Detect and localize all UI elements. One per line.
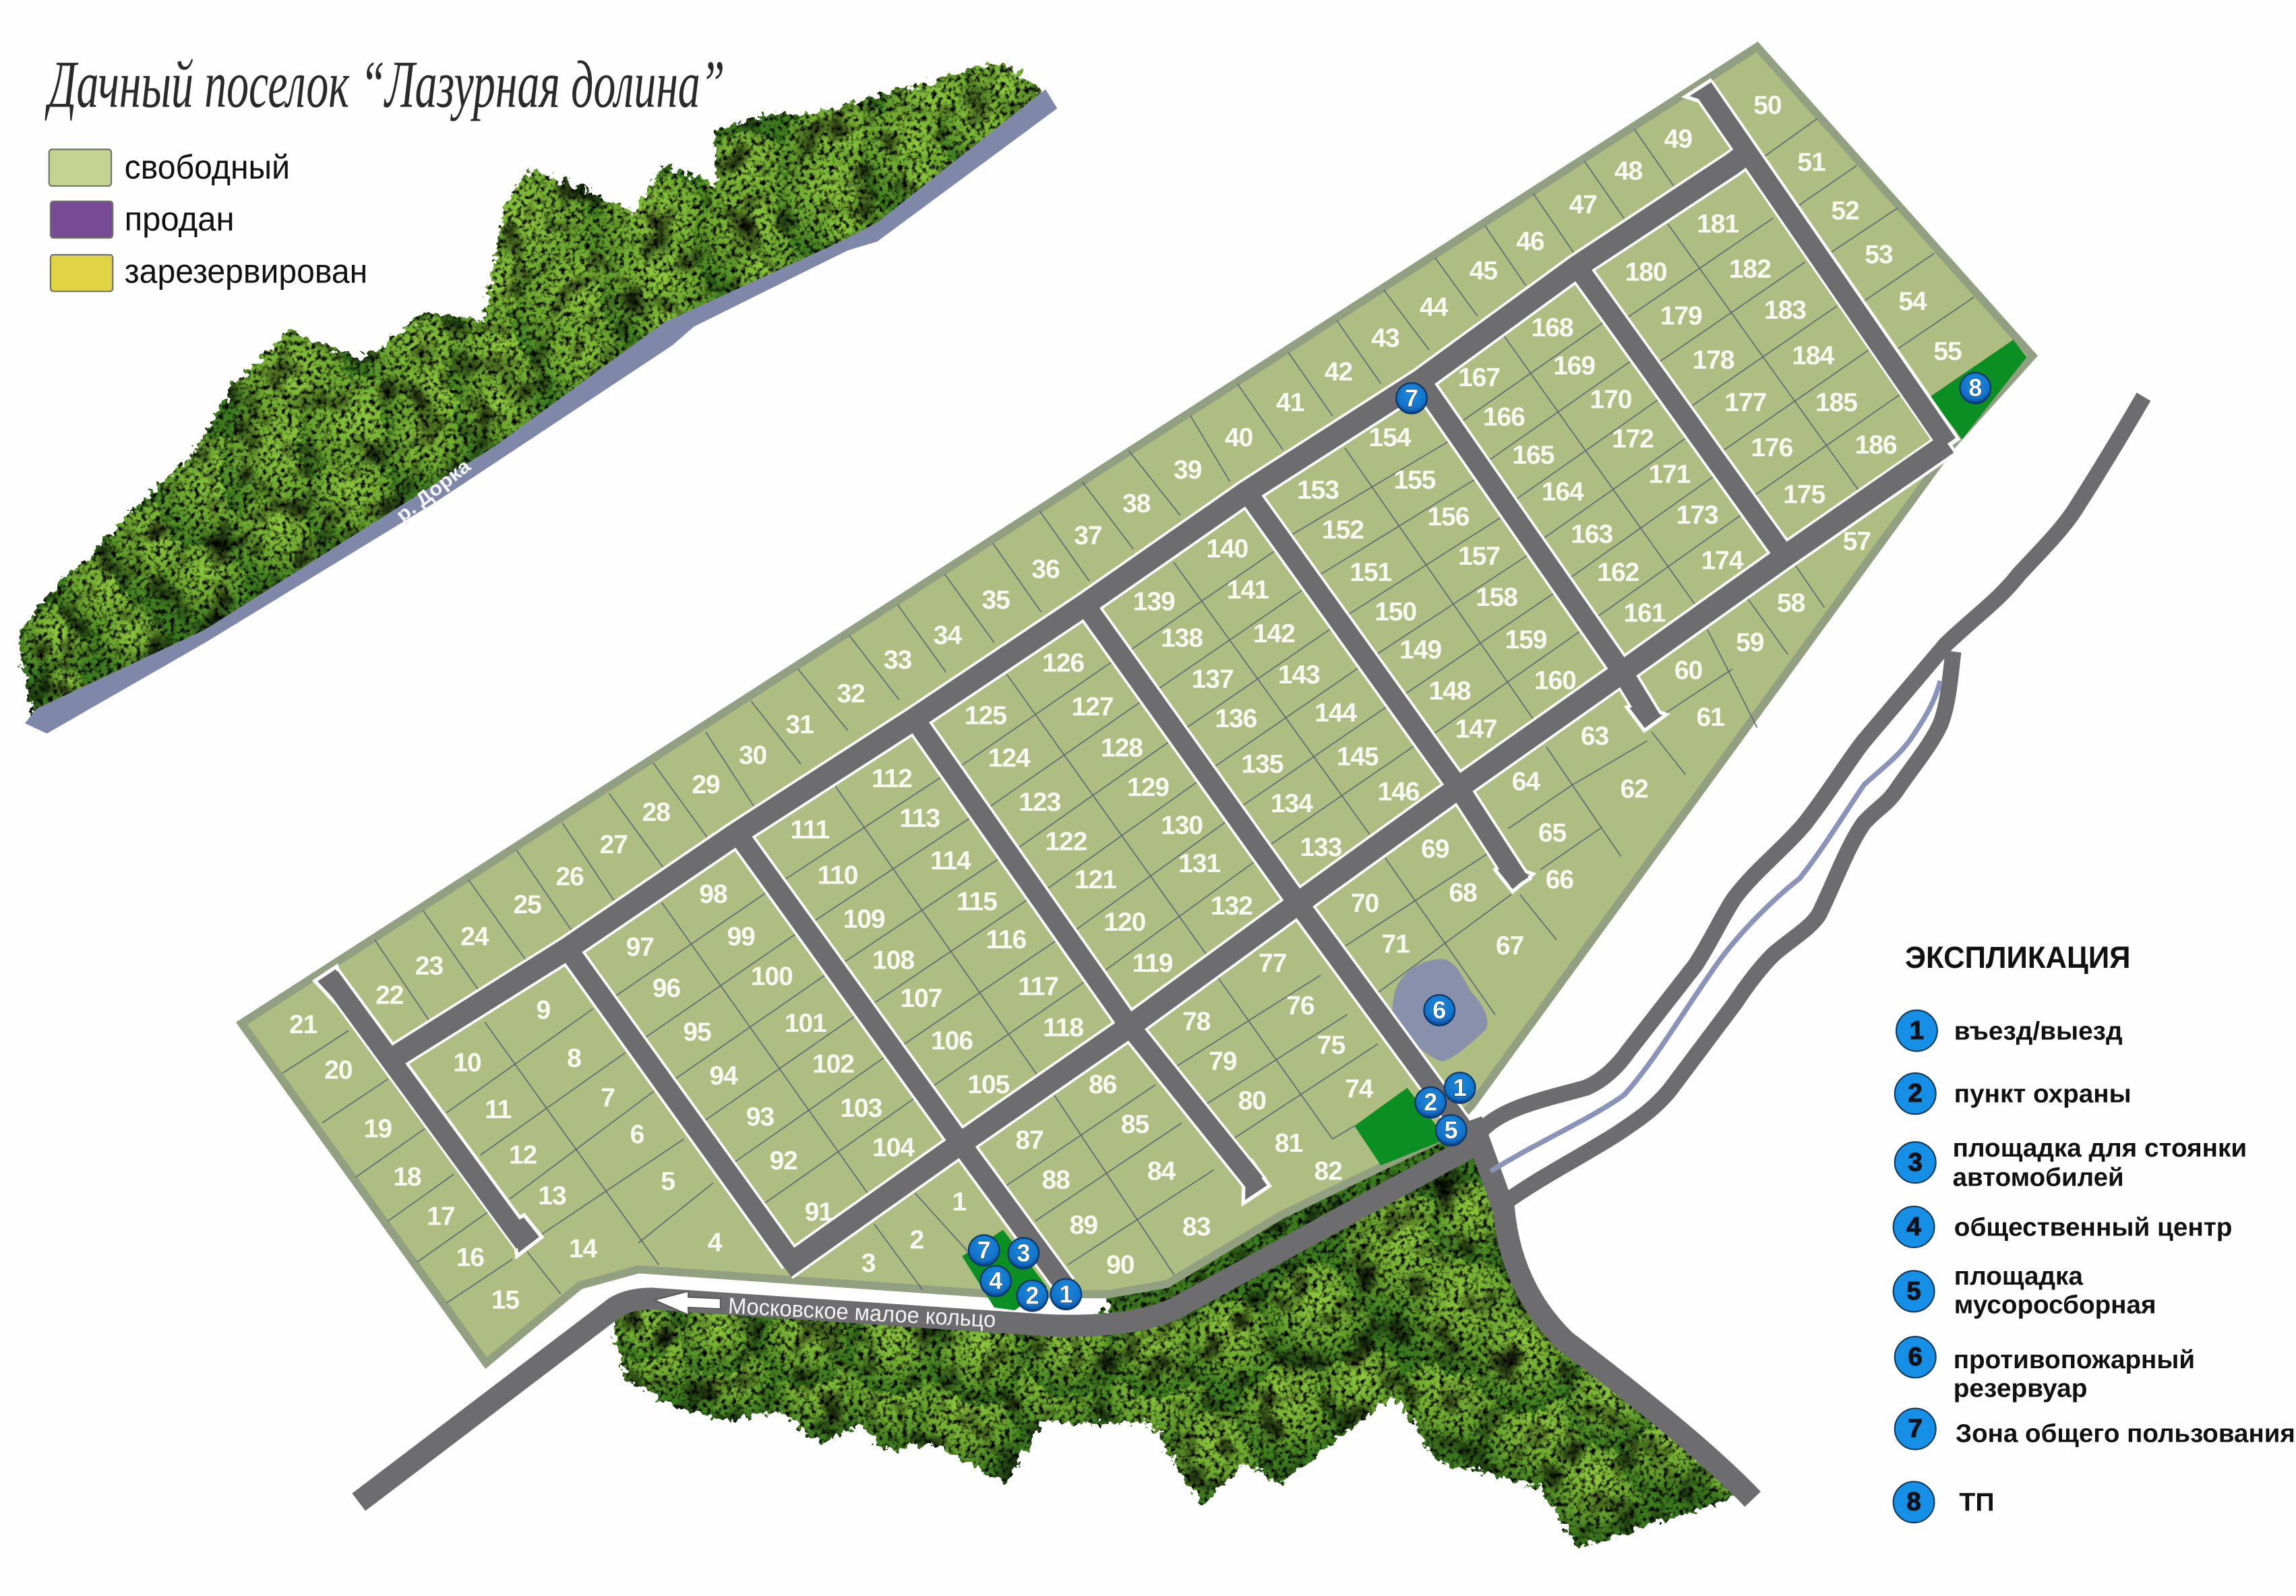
plot numbers: 84 xyxy=(1147,1157,1176,1186)
plot numbers: 155 xyxy=(1393,466,1436,495)
plot numbers: 108 xyxy=(872,946,914,975)
status legend: свободный xyxy=(125,148,290,186)
plot numbers: 138 xyxy=(1161,624,1203,653)
item 6: 6 xyxy=(1908,1343,1923,1372)
road south-east branch xyxy=(1472,1120,1753,1499)
map markers: 7 xyxy=(1405,385,1418,412)
plot numbers: 12 xyxy=(509,1140,537,1169)
plot numbers: 33 xyxy=(884,646,912,675)
plot numbers: 40 xyxy=(1225,423,1253,452)
plot numbers: 172 xyxy=(1612,425,1654,454)
plot numbers: 20 xyxy=(324,1055,353,1084)
plot numbers: 78 xyxy=(1182,1008,1211,1037)
plot numbers: 26 xyxy=(555,863,584,892)
plot numbers: 15 xyxy=(491,1285,519,1314)
plot numbers: 70 xyxy=(1351,889,1379,918)
plot numbers: 184 xyxy=(1792,341,1834,370)
plot numbers: 62 xyxy=(1621,774,1648,803)
plot numbers: 160 xyxy=(1534,667,1576,696)
plot numbers: 80 xyxy=(1238,1086,1266,1115)
plot numbers: 29 xyxy=(692,770,720,799)
plot numbers: 35 xyxy=(981,586,1010,615)
plot numbers: 101 xyxy=(785,1009,826,1038)
plot numbers: 11 xyxy=(485,1095,511,1124)
plot numbers: 67 xyxy=(1496,931,1524,960)
plot numbers: 136 xyxy=(1215,704,1257,733)
status legend: продан xyxy=(125,200,235,238)
map markers: 8 xyxy=(1968,375,1982,402)
road stub ends xyxy=(315,81,1725,1256)
plot numbers: 82 xyxy=(1315,1157,1342,1186)
item 4: общественный центр xyxy=(1954,1213,2233,1241)
plot numbers: 65 xyxy=(1538,819,1567,848)
plot numbers: 170 xyxy=(1590,386,1632,415)
plot numbers: 23 xyxy=(415,952,443,981)
plot numbers: 164 xyxy=(1542,477,1584,506)
swatch: free xyxy=(49,150,111,186)
plot numbers: 177 xyxy=(1724,388,1767,417)
plot numbers: 3 xyxy=(862,1249,876,1278)
trees along the river xyxy=(0,44,1069,732)
plot numbers: 123 xyxy=(1019,788,1061,817)
plot numbers: 124 xyxy=(988,744,1031,773)
plot numbers: 131 xyxy=(1178,849,1220,878)
plot numbers: 18 xyxy=(393,1163,421,1192)
river label: р. Дорка xyxy=(392,454,475,526)
plot numbers: 151 xyxy=(1350,558,1391,587)
plot numbers: 175 xyxy=(1783,481,1825,510)
plot numbers: 46 xyxy=(1516,227,1544,256)
item 8: 8 xyxy=(1906,1488,1921,1516)
road lower branch along the stream xyxy=(1504,652,1954,1204)
plot numbers: 169 xyxy=(1553,352,1595,381)
plot numbers: 76 xyxy=(1286,991,1315,1020)
plot numbers: 41 xyxy=(1276,388,1304,417)
plot numbers: 176 xyxy=(1751,433,1793,462)
plot numbers: 132 xyxy=(1211,892,1252,921)
plot numbers: 100 xyxy=(751,962,793,991)
plot numbers: 49 xyxy=(1664,125,1692,154)
map markers: 1 xyxy=(1059,1281,1073,1308)
item 3: площадка для стоянки xyxy=(1953,1134,2247,1163)
plot numbers: 117 xyxy=(1018,973,1058,1002)
plot numbers: 75 xyxy=(1317,1031,1346,1060)
map markers: 3 xyxy=(1017,1239,1030,1266)
plot numbers: 111 xyxy=(790,816,829,845)
plot numbers: 7 xyxy=(601,1084,615,1113)
plot numbers: 149 xyxy=(1399,636,1441,665)
plot numbers: 59 xyxy=(1736,628,1764,657)
explication xyxy=(1894,940,2295,1523)
plot numbers: 106 xyxy=(931,1026,973,1055)
plot numbers: 107 xyxy=(900,984,942,1013)
plot numbers: 103 xyxy=(840,1094,882,1123)
plot numbers: 159 xyxy=(1505,625,1547,654)
plot numbers: 99 xyxy=(727,923,755,952)
plot numbers: 21 xyxy=(289,1010,318,1039)
plot numbers: 102 xyxy=(812,1050,854,1079)
plot numbers: 182 xyxy=(1729,255,1771,284)
plot numbers: 130 xyxy=(1161,811,1203,840)
plot numbers: 86 xyxy=(1089,1070,1117,1099)
item 5: площадка xyxy=(1954,1262,2084,1291)
map markers xyxy=(969,373,1991,1311)
plot numbers: 157 xyxy=(1458,542,1500,571)
plot numbers: 25 xyxy=(513,890,541,919)
green zone at transformer xyxy=(1930,340,2026,439)
item 3 xyxy=(1895,1134,2247,1192)
plot numbers: 34 xyxy=(934,621,962,650)
plot numbers: 105 xyxy=(967,1070,1010,1099)
plot numbers: 153 xyxy=(1297,476,1339,505)
plot numbers: 28 xyxy=(642,798,670,827)
plot numbers: 143 xyxy=(1278,661,1320,689)
plot numbers: 121 xyxy=(1075,865,1116,894)
item 7: 7 xyxy=(1908,1415,1923,1443)
map markers: 7 xyxy=(977,1237,991,1264)
plot numbers: 58 xyxy=(1777,588,1805,617)
plot numbers: 135 xyxy=(1241,749,1283,778)
plot numbers: 8 xyxy=(567,1044,581,1073)
plot numbers: 88 xyxy=(1042,1165,1070,1194)
plot numbers: 55 xyxy=(1933,337,1962,366)
plot numbers: 94 xyxy=(709,1062,738,1091)
plot numbers: 152 xyxy=(1322,516,1364,545)
plot numbers: 30 xyxy=(739,741,767,770)
fire reservoir xyxy=(1393,959,1487,1062)
plot numbers: 51 xyxy=(1797,148,1825,177)
plot numbers: 129 xyxy=(1127,773,1169,802)
plot numbers: 104 xyxy=(872,1134,915,1163)
plot numbers: 158 xyxy=(1476,583,1517,612)
white road edges xyxy=(326,88,1950,1285)
plot numbers: 181 xyxy=(1697,210,1739,239)
plot numbers: 166 xyxy=(1483,403,1525,432)
plot numbers: 89 xyxy=(1070,1211,1097,1240)
plot numbers: 122 xyxy=(1045,828,1087,857)
plot numbers: 156 xyxy=(1427,502,1470,531)
item 7: Зона общего пользования xyxy=(1956,1420,2295,1448)
road label: Московское малое кольцо xyxy=(727,1294,996,1332)
plot numbers: 13 xyxy=(538,1181,566,1210)
plot numbers: 119 xyxy=(1132,949,1173,978)
item 5 xyxy=(1894,1262,2156,1320)
plot numbers: 146 xyxy=(1377,778,1420,807)
plot numbers: 98 xyxy=(699,880,727,909)
plot numbers: 133 xyxy=(1300,833,1342,862)
item 5: 5 xyxy=(1906,1277,1921,1306)
green zone near entrance 2 xyxy=(1354,1088,1447,1165)
plot numbers: 109 xyxy=(843,905,885,934)
map markers: 6 xyxy=(1432,997,1446,1024)
plot numbers: 168 xyxy=(1532,313,1573,342)
item 6 xyxy=(1895,1337,2195,1403)
plot numbers: 148 xyxy=(1428,677,1471,706)
item 2: пункт охраны xyxy=(1954,1080,2132,1109)
road upper branch along the stream xyxy=(1474,397,2144,1139)
item 1: 1 xyxy=(1910,1016,1924,1045)
plot numbers: 125 xyxy=(965,702,1006,731)
plot numbers: 186 xyxy=(1855,431,1897,460)
plot numbers: 92 xyxy=(769,1146,797,1175)
plot numbers: 140 xyxy=(1206,534,1248,563)
site boundary xyxy=(241,47,2032,1363)
plot numbers: 43 xyxy=(1371,324,1399,352)
status legend xyxy=(49,148,367,291)
item 5: мусоросборная xyxy=(1954,1291,2156,1320)
map markers: 2 xyxy=(1424,1089,1437,1116)
map markers: 5 xyxy=(1445,1117,1458,1144)
plot numbers: 54 xyxy=(1898,287,1927,316)
plot numbers: 85 xyxy=(1121,1110,1149,1139)
plot numbers: 145 xyxy=(1337,743,1379,772)
plot numbers: 77 xyxy=(1259,949,1287,978)
item 4: 4 xyxy=(1906,1213,1921,1241)
plot numbers: 6 xyxy=(630,1120,644,1149)
plot numbers: 66 xyxy=(1546,865,1573,894)
swatch: sold xyxy=(51,202,113,238)
plot numbers: 173 xyxy=(1676,501,1718,530)
map markers: 2 xyxy=(1025,1282,1039,1309)
plot numbers: 113 xyxy=(899,804,940,833)
forest below the road xyxy=(611,1143,1734,1549)
plot numbers: 63 xyxy=(1581,722,1609,751)
plot numbers: 48 xyxy=(1614,157,1642,186)
plot numbers: 79 xyxy=(1209,1047,1237,1076)
plot numbers: 39 xyxy=(1174,456,1202,485)
plot numbers: 144 xyxy=(1315,698,1357,727)
plot numbers: 61 xyxy=(1696,703,1724,732)
plot numbers: 134 xyxy=(1271,789,1313,818)
plot numbers: 161 xyxy=(1623,599,1666,628)
plot numbers xyxy=(289,91,1962,1314)
swatch: reserved xyxy=(51,255,113,291)
plot numbers: 139 xyxy=(1133,587,1175,616)
status legend: зарезервирован xyxy=(125,252,367,290)
plot numbers: 178 xyxy=(1692,346,1734,375)
plot numbers: 44 xyxy=(1420,293,1449,322)
outer road: Moscow small ring xyxy=(359,1145,1474,1502)
plot numbers: 112 xyxy=(872,764,912,793)
plot numbers: 50 xyxy=(1753,91,1782,120)
explication heading: ЭКСПЛИКАЦИЯ xyxy=(1905,940,2131,975)
plot numbers: 165 xyxy=(1512,441,1554,470)
plot numbers: 147 xyxy=(1455,714,1497,743)
plot numbers: 114 xyxy=(930,847,971,876)
plot numbers: 163 xyxy=(1571,520,1612,549)
item 4 xyxy=(1894,1206,2233,1248)
plot numbers: 91 xyxy=(805,1198,833,1227)
plot numbers: 142 xyxy=(1253,619,1295,648)
plot numbers: 45 xyxy=(1470,256,1497,285)
item 8: ТП xyxy=(1959,1489,1995,1517)
internal roads xyxy=(330,88,1947,1285)
plot numbers: 128 xyxy=(1101,734,1143,763)
item 3: автомобилей xyxy=(1953,1164,2124,1192)
plot numbers: 171 xyxy=(1648,460,1691,489)
item 1 xyxy=(1896,1010,2123,1051)
green zone near entrance 1 xyxy=(962,1230,1047,1310)
plot numbers: 97 xyxy=(626,933,654,962)
plot numbers: 2 xyxy=(909,1225,924,1254)
plot numbers: 27 xyxy=(600,830,628,859)
plot numbers: 47 xyxy=(1569,191,1597,220)
plot numbers: 38 xyxy=(1122,489,1151,518)
plot numbers: 31 xyxy=(785,710,814,739)
map markers: 4 xyxy=(989,1268,1002,1295)
plot numbers: 60 xyxy=(1674,656,1703,685)
stream xyxy=(1490,681,1940,1171)
plot numbers: 90 xyxy=(1106,1250,1135,1279)
plot numbers: 10 xyxy=(453,1049,481,1078)
plot numbers: 162 xyxy=(1597,558,1639,587)
road direction arrow xyxy=(655,1291,721,1315)
plot numbers: 42 xyxy=(1325,357,1352,386)
plot numbers: 127 xyxy=(1071,693,1114,722)
plot numbers: 24 xyxy=(460,923,489,952)
plot numbers: 167 xyxy=(1458,363,1500,392)
plot numbers: 81 xyxy=(1275,1129,1303,1158)
item 6: резервуар xyxy=(1954,1374,2087,1403)
plot numbers: 69 xyxy=(1421,834,1449,863)
plot numbers: 74 xyxy=(1345,1075,1374,1104)
plot numbers: 137 xyxy=(1192,665,1234,694)
plot numbers: 116 xyxy=(986,925,1027,954)
plot numbers: 110 xyxy=(818,861,858,890)
plot numbers: 57 xyxy=(1843,527,1871,556)
plot numbers: 150 xyxy=(1374,598,1416,627)
plot numbers: 9 xyxy=(537,995,551,1024)
plot numbers: 32 xyxy=(837,679,865,708)
item 2 xyxy=(1895,1073,2132,1114)
plot numbers: 180 xyxy=(1625,258,1667,287)
plot numbers: 179 xyxy=(1660,302,1702,331)
plot numbers: 118 xyxy=(1043,1013,1083,1042)
plot numbers: 96 xyxy=(653,974,680,1003)
plot numbers: 120 xyxy=(1104,908,1146,937)
item 3: 3 xyxy=(1908,1148,1923,1177)
plot numbers: 22 xyxy=(375,981,404,1010)
plot numbers: 17 xyxy=(427,1202,455,1231)
item 2: 2 xyxy=(1908,1080,1923,1108)
plot numbers: 16 xyxy=(456,1243,484,1272)
plot numbers: 93 xyxy=(746,1103,774,1132)
plot numbers: 37 xyxy=(1074,522,1102,551)
title: Дачный поселок “Лазурная долина” xyxy=(44,47,725,122)
plot numbers: 53 xyxy=(1865,241,1893,270)
plot numbers: 141 xyxy=(1227,576,1269,605)
plot numbers: 154 xyxy=(1368,423,1412,452)
map markers: 1 xyxy=(1453,1074,1467,1101)
plot numbers: 126 xyxy=(1042,649,1084,678)
plot numbers: 64 xyxy=(1512,767,1540,796)
plot numbers: 4 xyxy=(708,1229,723,1258)
plot numbers: 68 xyxy=(1449,879,1477,908)
plot numbers: 115 xyxy=(957,888,997,917)
plot numbers: 185 xyxy=(1815,388,1857,417)
item 6: противопожарный xyxy=(1954,1346,2195,1374)
plot numbers: 19 xyxy=(364,1114,392,1143)
plot numbers: 71 xyxy=(1381,930,1410,959)
plot numbers: 36 xyxy=(1031,555,1060,584)
plot numbers: 14 xyxy=(569,1234,598,1263)
plot numbers: 183 xyxy=(1764,296,1806,325)
plot numbers: 1 xyxy=(952,1188,966,1217)
item 7 xyxy=(1895,1409,2295,1450)
plot numbers: 87 xyxy=(1015,1126,1044,1155)
plot numbers: 174 xyxy=(1701,546,1744,575)
plot numbers: 95 xyxy=(683,1018,711,1047)
river Dorka band xyxy=(25,90,1057,733)
plot numbers: 83 xyxy=(1182,1213,1211,1241)
item 1: въезд/выезд xyxy=(1954,1017,2123,1045)
item 8 xyxy=(1894,1481,1995,1523)
site plan xyxy=(241,47,2032,1363)
plot boundary lines xyxy=(282,119,1974,1303)
plot numbers: 52 xyxy=(1831,196,1859,225)
plot numbers: 5 xyxy=(661,1167,675,1196)
